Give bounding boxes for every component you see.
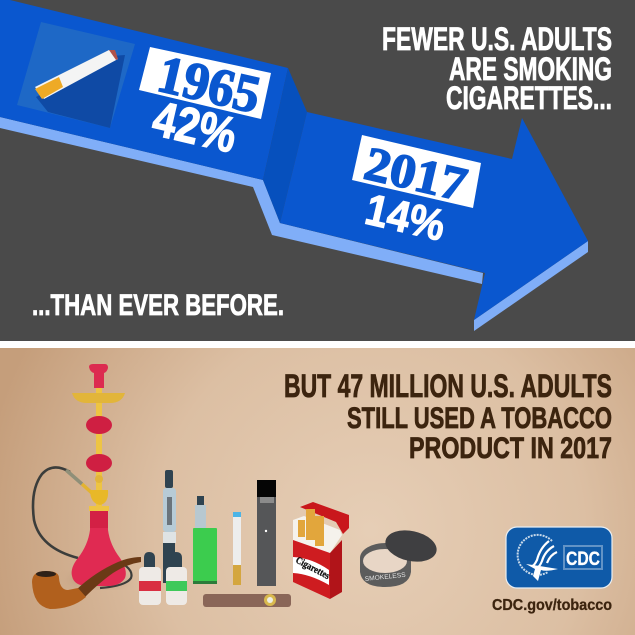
text: than ever before: ...THAN EVER BEFORE. bbox=[32, 289, 284, 322]
icon: cigarette pack bbox=[293, 502, 349, 599]
panel: dark upper background bbox=[0, 0, 635, 341]
logo: CDC badge bbox=[506, 527, 612, 588]
icon: green vape mod bbox=[193, 496, 217, 584]
descending blue arrow bbox=[0, 0, 588, 331]
icon: hookah bbox=[33, 364, 132, 588]
icon: smokeless tobacco tin bbox=[360, 526, 440, 587]
icon: cigarette in square inset bbox=[17, 22, 135, 128]
icon: cigar bbox=[203, 594, 291, 607]
2017 label: 2017 bbox=[360, 137, 472, 212]
icon: e-liquid bottles bbox=[139, 552, 187, 605]
heading: 47 million adults bbox=[284, 368, 612, 465]
icon: pod device bbox=[257, 480, 276, 586]
text: CDC web address: CDC.gov/tobacco bbox=[492, 597, 612, 614]
14 percent figure: 14% bbox=[361, 185, 450, 251]
1965 label: 1965 bbox=[152, 45, 266, 125]
42 percent figure: 42% bbox=[148, 90, 242, 164]
panel: tan lower background bbox=[0, 348, 635, 635]
icon: tobacco pipe bbox=[32, 557, 141, 609]
logo: CDC badge: CDC bbox=[566, 549, 600, 570]
icon: smokeless tobacco tin: SMOKELESS bbox=[364, 572, 407, 583]
heading: fewer adults smoking bbox=[382, 21, 612, 116]
icon: e-cigarette stick bbox=[233, 512, 241, 585]
icon: vape pen bbox=[163, 470, 176, 583]
icon: cigarette pack: Cigarettes bbox=[294, 555, 332, 582]
